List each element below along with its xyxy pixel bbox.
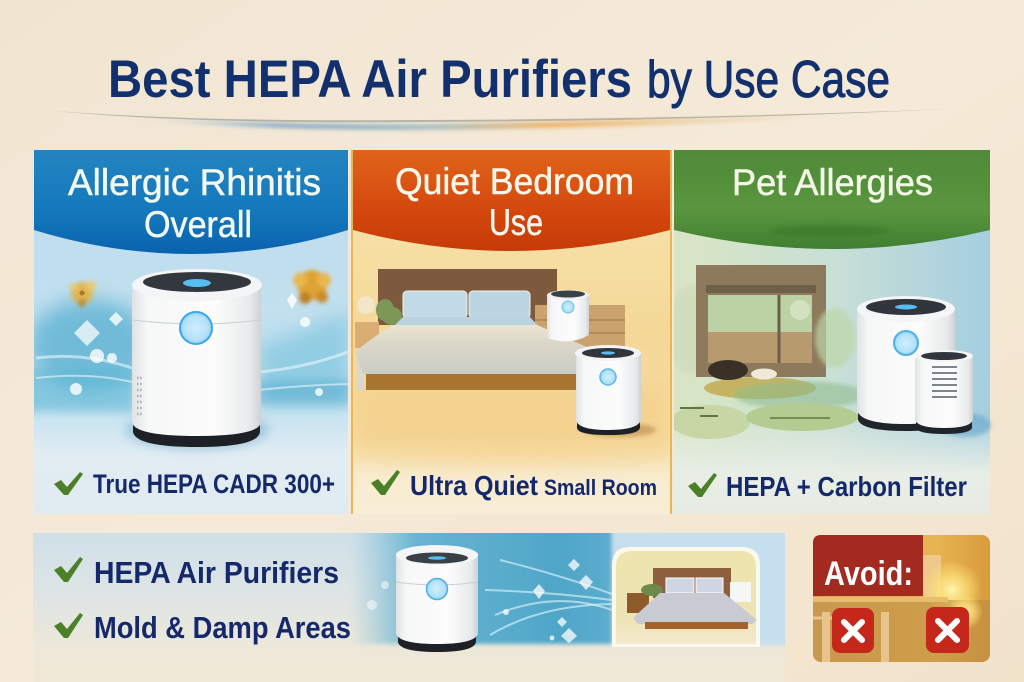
title swoosh underline (55, 109, 947, 130)
floor purifier (575, 345, 656, 437)
title: by Use Case (647, 51, 890, 109)
panel header: allergic rhinitis: Allergic Rhinitis (68, 162, 321, 203)
panel: pet allergies (668, 150, 991, 514)
panel header: quiet bedroom: Quiet Bedroom (395, 161, 634, 202)
panel: allergic rhinitis (20, 150, 350, 514)
floor wash (353, 385, 670, 462)
panel header: quiet bedroom (353, 150, 670, 251)
air flow waves (20, 299, 350, 412)
large purifier (857, 296, 955, 431)
icon: allergen flower left (70, 281, 96, 307)
panel header: allergic rhinitis (34, 150, 348, 254)
icon: x left (832, 608, 874, 653)
window and pet scene (668, 265, 866, 439)
small purifier on nightstand (547, 290, 589, 341)
panel: bottom recommendations (33, 525, 790, 682)
feature: mold and damp: Mold & Damp Areas (94, 610, 351, 645)
title: Best HEPA Air Purifiers (108, 50, 632, 109)
air purifier (125, 269, 269, 450)
avoid label (813, 535, 923, 596)
panel header: quiet bedroom: Use (489, 202, 543, 243)
panel header: pet allergies (674, 150, 990, 249)
icon: allergen flower right (293, 270, 331, 304)
avoid label: Avoid: (824, 555, 913, 593)
panel header: allergic rhinitis: Overall (144, 204, 252, 245)
feature: hepa carbon: HEPA + Carbon Filter (726, 471, 967, 502)
bed illustration (355, 269, 625, 390)
icon: x right (926, 607, 969, 653)
panel: quiet bedroom (351, 150, 672, 514)
panel header: pet allergies: Pet Allergies (732, 162, 933, 203)
blue air band (350, 525, 790, 645)
small purifier (915, 350, 991, 437)
feature: true hepa: True HEPA CADR 300+ (93, 469, 335, 499)
decorative particles (70, 293, 323, 396)
feature: hepa air purifiers: HEPA Air Purifiers (94, 555, 339, 590)
feature: ultra quiet: Small Room (544, 475, 657, 500)
feature: ultra quiet (371, 470, 657, 501)
panel: avoid (813, 535, 990, 662)
feature: ultra quiet: Ultra Quiet (410, 470, 538, 501)
air purifier (396, 545, 478, 652)
bedroom thumbnail (612, 547, 760, 647)
